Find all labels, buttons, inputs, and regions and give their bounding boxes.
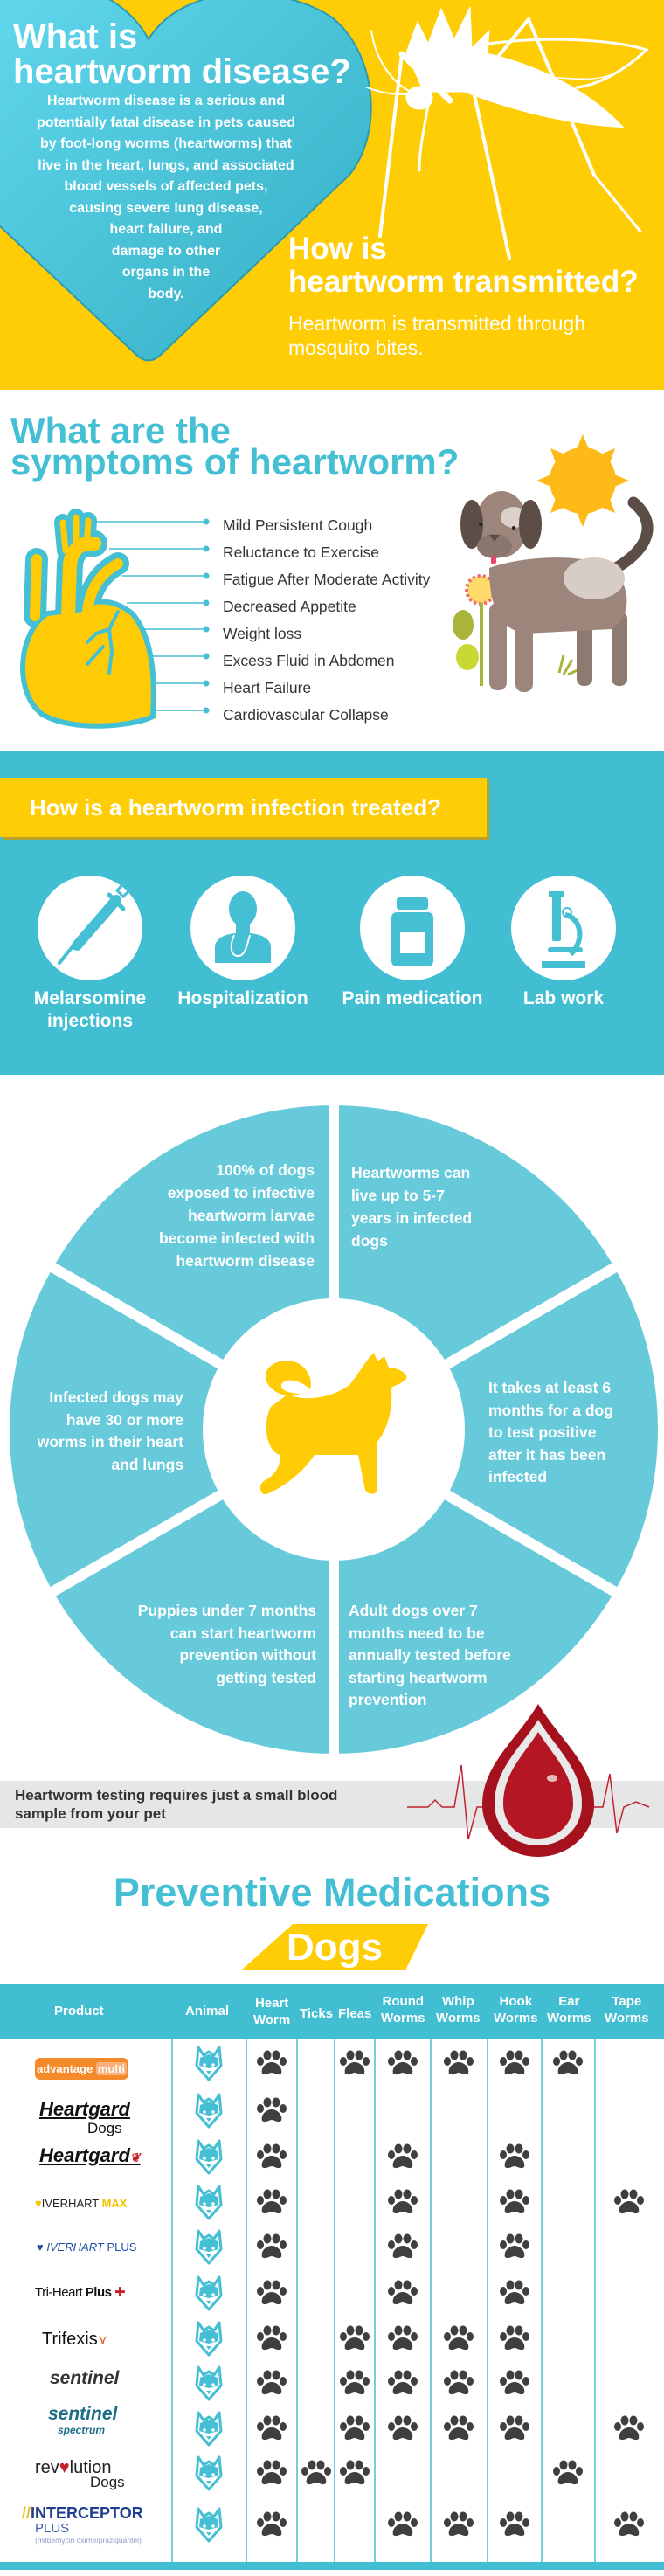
product logos: advantage multi [37,2062,125,2075]
table header: Worms [381,2011,425,2025]
product logos: spectrum [58,2424,105,2436]
text: disease description: causing severe lung disease, [69,201,263,215]
list: symptoms [223,516,430,724]
wheel text: top-left: become infected with [159,1229,315,1247]
table header: Hook [500,1994,532,2009]
product logos [22,2058,143,2545]
table header: Fleas [338,2006,371,2021]
text: disease description: by foot-long worms (heartworms) that [40,136,292,151]
text: disease description: live in the heart, lungs, and associated [38,157,294,173]
section: treatment [0,751,664,1075]
heading: what is heartworm disease [13,17,351,91]
banner: how is it treated: How is a heartworm infection treated? [30,794,441,821]
chart: facts wheel [10,1105,658,1754]
section: symptoms [10,410,459,482]
product logos: Heartgard [39,2098,130,2120]
section: treatment: Pain medication [342,988,483,1008]
wheel text: bottom-right: months need to be [349,1624,485,1641]
icon: blood drop with heartbeat [407,1704,650,1857]
section: treatment: Hospitalization [177,988,308,1008]
wheel text: top-left: exposed to infective [168,1184,315,1201]
icon: microscope [511,876,616,980]
illustration: heart diagram with connectors [20,509,210,729]
wheel text: bottom-right: prevention [349,1691,426,1708]
wheel text: bottom-right: annually tested before [349,1646,511,1664]
section: treatment: Lab work [523,988,604,1008]
wheel text: top-left: heartworm larvae [188,1207,315,1224]
list: symptoms: Excess Fluid in Abdomen [223,652,395,669]
heading: what is heartworm disease: What is [13,17,137,56]
wheel text: bottom-left: prevention without [179,1646,316,1664]
text: disease description: body. [148,287,184,301]
icon: syringe [38,876,142,980]
table header [0,1984,664,2039]
text: transmission [288,312,585,359]
product logos: //INTERCEPTOR [22,2504,143,2522]
wheel text: left: have 30 or more [66,1410,183,1428]
table header: Worm [253,2012,290,2027]
table header: Worms [605,2011,649,2025]
banner: how is it treated [0,778,487,837]
wheel text: top-left: 100% of dogs [216,1161,315,1179]
illustration: dog with sun [453,434,654,692]
wheel text: top-right: dogs [351,1232,388,1250]
wheel text: top-left: heartworm disease [176,1252,315,1270]
heading: symptoms [10,410,459,482]
wheel text: bottom-right: Adult dogs over 7 [349,1602,478,1619]
wheel text: bottom-left: can start heartworm [170,1624,316,1641]
wheel text: top-right: live up to 5-7 [351,1187,445,1204]
product logos: Tri-Heart Plus ✚ [35,2285,125,2300]
list: symptoms: Decreased Appetite [223,598,356,615]
section: treatment: Melarsomine [34,988,146,1008]
table header: Whip [442,1994,474,2009]
wheel text: right: after it has been [488,1445,605,1463]
wheel text: right: months for a dog [488,1402,613,1419]
icon: doctor [190,876,295,980]
table header: Ear [558,1994,579,2009]
table header: Heart [255,1996,288,2011]
wheel text: right: to test positive [488,1423,596,1441]
table: preventive medications [0,1984,664,2570]
text: disease description: blood vessels of affected pets, [65,179,267,194]
wheel text: top-left [159,1161,315,1270]
labels: treatments [34,988,604,1031]
table grid and icons [0,2039,664,2570]
heading: how is heartworm transmitted: How is [288,232,387,266]
text: disease description: damage to other [112,243,220,259]
wheel text: left [37,1388,183,1473]
callout: blood test bar: Heartworm testing requires just a small blood [15,1787,337,1804]
product logos: PLUS [35,2521,69,2536]
text: disease description: organs in the [122,265,210,280]
callout: blood test bar: sample from your pet [15,1805,166,1822]
mosquito [367,7,647,258]
list: symptoms: Cardiovascular Collapse [223,706,389,724]
table header: Ticks [300,2006,333,2021]
animal column huskies [197,2047,221,2541]
list: symptoms: Mild Persistent Cough [223,516,372,534]
wheel text: bottom-left [138,1602,316,1686]
wheel text: top-right: Heartworms can [351,1164,470,1181]
banner: dogs: Dogs [287,1926,383,1969]
wheel text: right [488,1379,613,1485]
table header: Worms [494,2011,538,2025]
table header: Worms [547,2011,591,2025]
icon: pill bottle [360,876,465,980]
product logos: Dogs [90,2474,125,2490]
heading: how is heartworm transmitted: heartworm transmitted? [288,265,639,299]
heading: symptoms: symptoms of heartworm? [10,441,459,482]
product logos: Heartgard❦ [39,2144,141,2166]
product logos: sentinel [50,2368,119,2388]
illustration: heart and mosquito [0,0,649,362]
wheel text: top-right: years in infected [351,1209,472,1227]
heading: how is heartworm transmitted [288,232,639,299]
wheel text: left: and lungs [111,1456,183,1473]
heading: preventive medications: Preventive Medications [114,1870,550,1915]
icon: yellow dog silhouette [260,1353,406,1494]
text: disease description: potentially fatal disease in pets caused [37,115,295,129]
text: disease description: heart failure, and [110,222,222,237]
product logos: Trifexis⋎ [42,2330,107,2349]
product logos: Dogs [87,2120,122,2136]
product logos: ♥IVERHART MAX [35,2197,127,2210]
paw marks [257,2050,644,2536]
table header: Worms [436,2011,481,2025]
product logos: (milbemycin oxime/praziquantel) [35,2536,142,2545]
product logos: rev♥lution [35,2458,111,2477]
heading: symptoms: What are the [10,410,231,451]
product logos: sentinel [48,2404,117,2424]
wheel text: right: It takes at least 6 [488,1379,611,1396]
wheel text: left: worms in their heart [38,1433,183,1451]
heading: what is heartworm disease: heartworm disease? [13,52,351,91]
wheel text: top-right [351,1164,472,1250]
table header: Round [383,1994,424,2009]
list: symptoms: Fatigue After Moderate Activity [223,571,430,588]
wheel text: bottom-left: getting tested [216,1669,316,1686]
list: symptoms: Reluctance to Exercise [223,544,379,561]
wheel text: bottom-right: starting heartworm [349,1669,488,1686]
banner: dogs [241,1924,428,1970]
section: treatment: injections [47,1011,133,1031]
table header: Tape [612,1994,641,2009]
table header: Product [54,2004,104,2019]
wheel text: right: infected [488,1468,547,1485]
heart shape [0,0,371,361]
section: intro (yellow) [0,0,664,390]
wheel text: bottom-right [349,1602,511,1708]
list: symptoms: Weight loss [223,625,301,642]
text: transmission: mosquito bites. [288,336,424,359]
text: transmission: Heartworm is transmitted through [288,312,585,335]
text: disease description: Heartworm disease is a serious and [47,93,285,108]
wheel text: left: Infected dogs may [49,1388,183,1406]
product logos: ♥ IVERHART PLUS [37,2240,136,2254]
text: disease description [37,93,295,301]
wheel text: bottom-left: Puppies under 7 months [138,1602,316,1619]
list: symptoms: Heart Failure [223,679,311,696]
callout: blood test bar [0,1781,664,1828]
table header: Animal [185,2004,229,2019]
